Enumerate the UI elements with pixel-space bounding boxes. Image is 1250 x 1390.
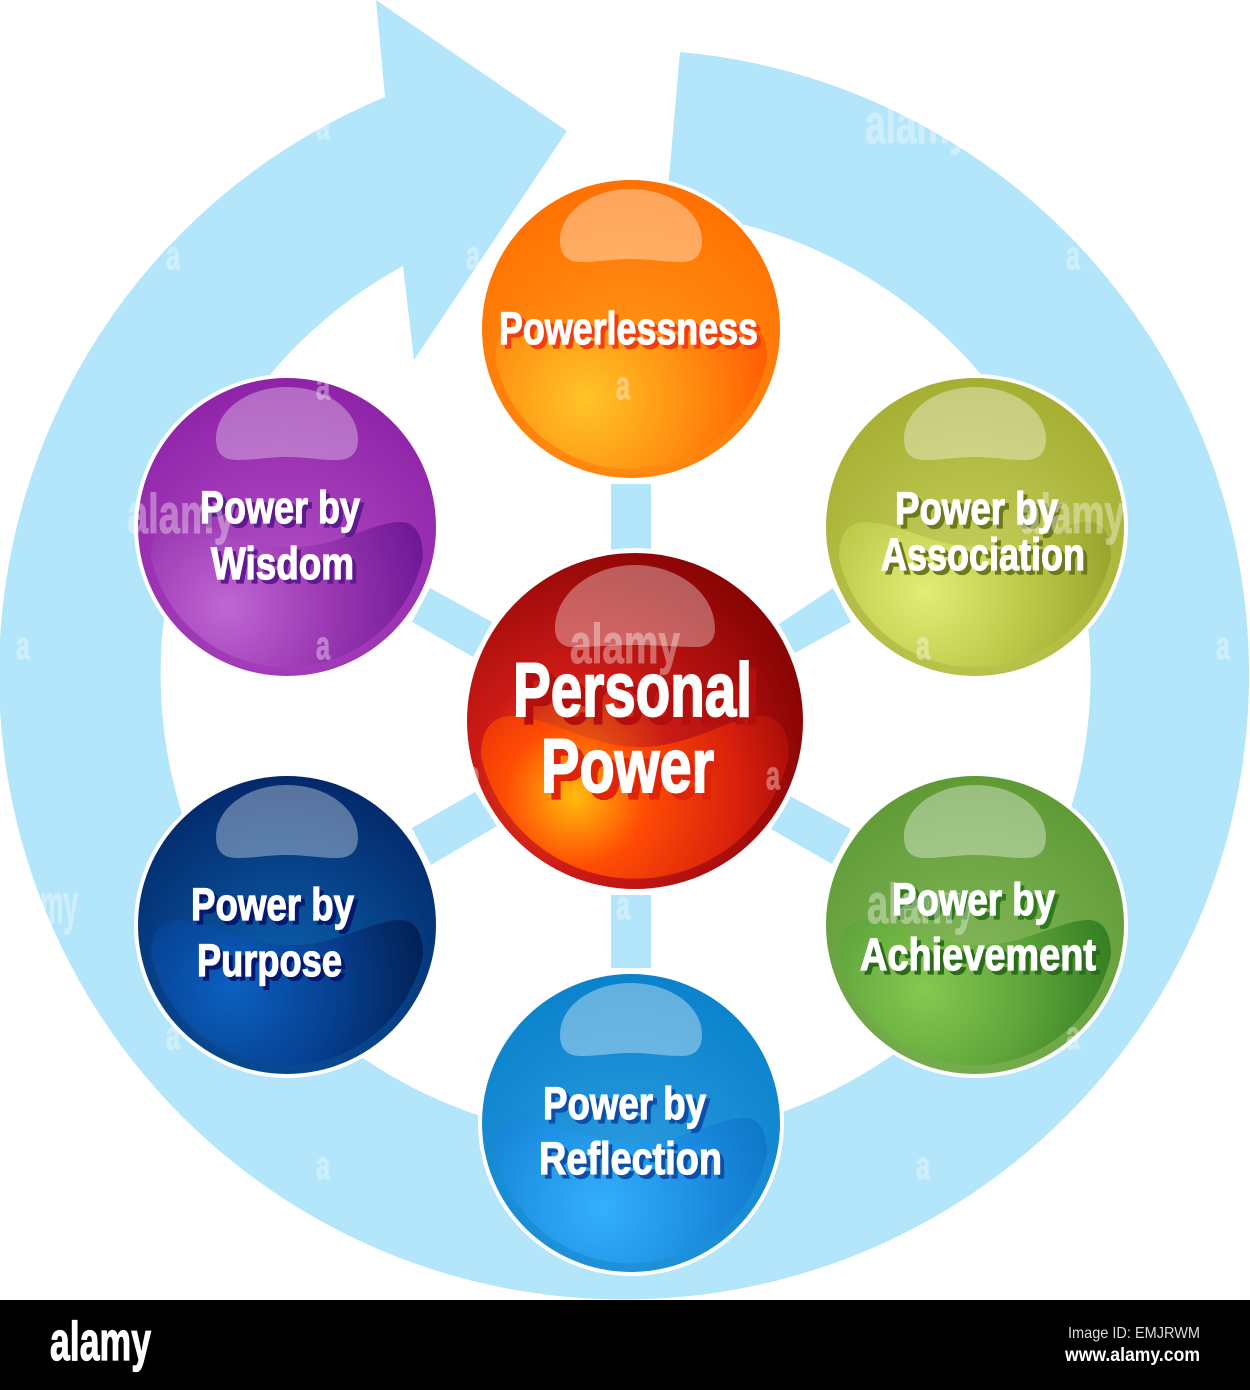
watermarks	[16, 92, 1230, 1188]
node: Power by Reflection: Power by	[547, 1082, 710, 1133]
node: Personal Power centre	[462, 548, 808, 894]
node: Power by Wisdom: Power by	[200, 482, 360, 533]
watermarks: alamy	[570, 612, 680, 675]
connector spokes	[412, 484, 851, 968]
node: Power by Achievement: Achievement	[860, 929, 1096, 980]
watermarks: a	[316, 364, 330, 408]
watermarks: a	[766, 754, 780, 798]
watermarks: a	[1066, 1014, 1080, 1058]
node: Power by Reflection: Reflection	[543, 1137, 726, 1188]
node: Power by Wisdom: Wisdom	[211, 538, 354, 589]
watermarks: a	[1066, 234, 1080, 278]
node: Power by Association	[822, 374, 1128, 680]
website: www.alamy.com	[1064, 1345, 1200, 1366]
node: Personal Power centre: Personal	[521, 656, 760, 741]
watermarks: a	[316, 104, 330, 148]
watermarks: alamy	[865, 92, 970, 155]
watermarks: a	[316, 624, 330, 668]
image id: Image ID: EMJRWM	[1068, 1325, 1200, 1342]
footer bar	[0, 1300, 1250, 1390]
node: Power by Association: Association	[881, 529, 1085, 580]
node: Power by Wisdom	[134, 374, 440, 680]
footer logo: alamy	[50, 1310, 151, 1372]
watermarks: a	[616, 364, 630, 408]
node: Power by Achievement	[822, 772, 1128, 1078]
node: Power by Reflection: Power by	[543, 1078, 706, 1129]
node: Power by Association: Power by	[895, 483, 1058, 534]
watermarks: a	[166, 1014, 180, 1058]
watermarks: alamy	[867, 872, 975, 935]
node: Power by Purpose: Power by	[191, 879, 354, 930]
node: Powerlessness: Powerlessness	[499, 303, 758, 354]
watermarks: a	[16, 624, 30, 668]
node: Power by Wisdom: Wisdom	[215, 542, 358, 593]
node: Power by Achievement: Power by	[892, 874, 1055, 925]
watermarks: a	[916, 1144, 930, 1188]
node: Power by Reflection: Reflection	[539, 1133, 722, 1184]
node: Power by Purpose: Purpose	[197, 935, 342, 986]
node: Power by Wisdom: Power by	[204, 486, 364, 537]
node: Power by Association: Association	[885, 533, 1089, 584]
watermarks: a	[616, 884, 630, 928]
watermarks: a	[166, 234, 180, 278]
node: Power by Reflection	[478, 970, 784, 1276]
watermarks: a	[466, 234, 480, 278]
watermarks: a	[1216, 624, 1230, 668]
watermarks: alamy	[127, 482, 235, 545]
watermarks: a	[916, 624, 930, 668]
node: Powerlessness	[478, 176, 784, 482]
node: Personal Power centre: Power	[548, 731, 721, 816]
watermarks: my	[40, 872, 78, 935]
node: Personal Power centre: Personal	[513, 648, 752, 733]
node: Power by Purpose: Purpose	[201, 939, 346, 990]
watermarks: alamy	[1020, 482, 1125, 545]
node: Power by Achievement: Power by	[896, 878, 1059, 929]
watermarks: a	[316, 1144, 330, 1188]
node: Power by Purpose	[134, 772, 440, 1078]
node: Personal Power centre: Power	[541, 724, 714, 809]
node: Power by Purpose: Power by	[195, 883, 358, 934]
watermarks: a	[466, 754, 480, 798]
node: Powerlessness: Powerlessness	[503, 307, 762, 358]
node: Power by Achievement: Achievement	[864, 933, 1100, 984]
node: Power by Association: Power by	[899, 487, 1062, 538]
